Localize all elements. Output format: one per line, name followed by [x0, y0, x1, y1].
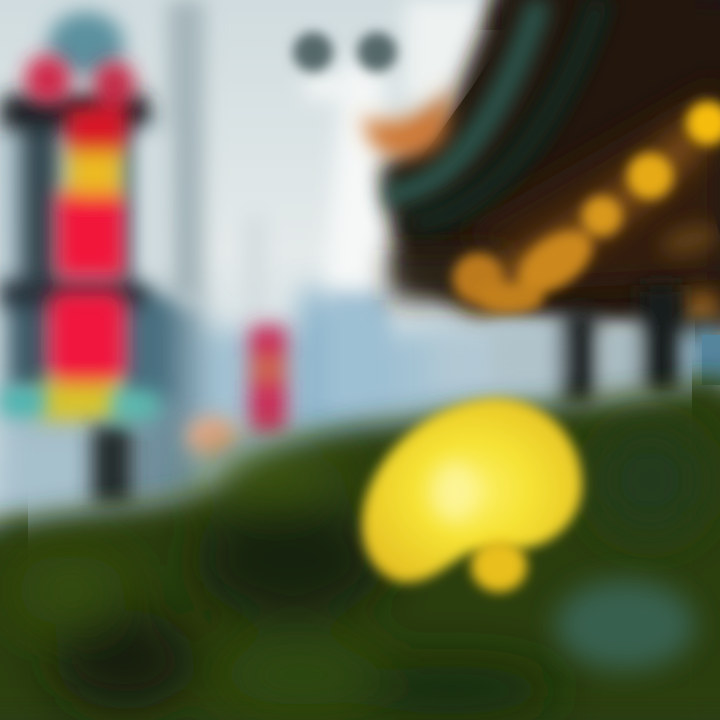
tower top red lamps — [25, 55, 71, 105]
foliage dark patches — [15, 425, 705, 715]
underside dark shadow — [390, 250, 510, 300]
tower teal band — [0, 388, 44, 416]
foliage solid underlayer — [0, 425, 720, 720]
tower columns — [22, 110, 58, 290]
roof dark mass — [380, 0, 720, 335]
hanging yellow lights — [453, 101, 720, 314]
pale towers in background — [168, 0, 485, 420]
roof green stripe — [385, 0, 540, 195]
roof orange eave tip — [360, 85, 452, 157]
coin highlight — [431, 462, 479, 522]
pagoda roof — [360, 0, 720, 405]
hanging yellow lights glow — [470, 130, 700, 300]
right side amber bands — [657, 219, 720, 261]
foliage soft mass — [0, 380, 720, 720]
foliage left edge strip — [0, 525, 28, 720]
tower side pale — [136, 130, 166, 280]
tower base — [92, 425, 132, 505]
tower crossbars — [0, 94, 150, 130]
pagoda columns — [490, 285, 720, 405]
foliage teal highlight — [555, 580, 695, 670]
tower yellow sections — [68, 152, 122, 194]
small orange glow — [186, 416, 238, 456]
green foliage — [0, 380, 720, 720]
yellow coin blob — [362, 398, 582, 592]
roof solid underlayer — [415, 0, 720, 290]
tower dome — [48, 12, 124, 76]
left tower structure — [0, 12, 172, 400]
street lamp globes — [293, 32, 397, 72]
roof right edge strip — [695, 0, 720, 330]
roof top edge strip — [495, 0, 720, 30]
distant city haze — [0, 120, 570, 540]
right edge pale strip — [702, 335, 720, 385]
coin lower lump — [471, 540, 527, 592]
tower red sections — [66, 106, 128, 156]
distant small red tower — [250, 326, 286, 432]
foliage right edge strip — [692, 385, 720, 720]
